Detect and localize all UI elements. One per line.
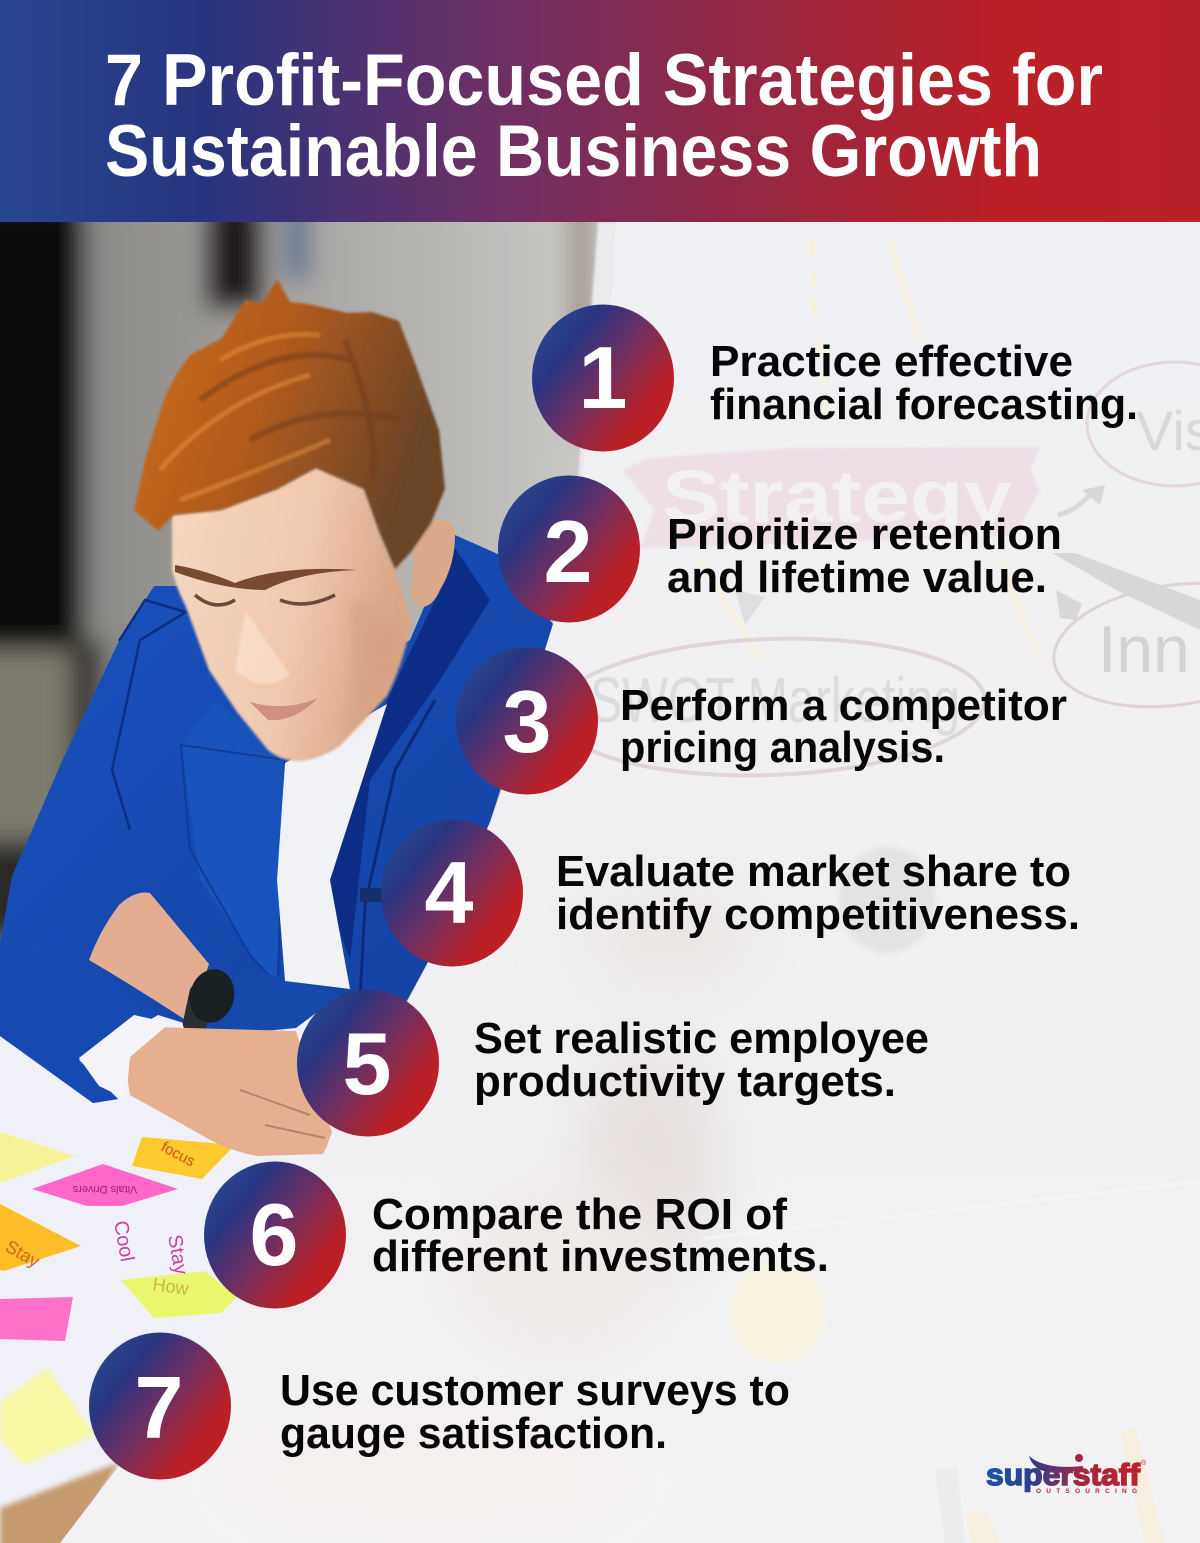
title (105, 40, 1103, 192)
step 1: financial forecasting. (710, 380, 1138, 429)
step 7: 7 (135, 1358, 183, 1457)
ear (411, 519, 455, 607)
sticky notes: Stay (163, 1233, 192, 1276)
step 3: Perform a competitor (620, 681, 1067, 730)
sticky notes: Cool (109, 1219, 138, 1263)
step 4: 4 (425, 843, 474, 942)
step 3 (456, 648, 1067, 794)
white shirt (277, 704, 387, 989)
step 2 (498, 476, 1062, 622)
step 3: pricing analysis. (620, 723, 945, 772)
step 1: Practice effective (710, 337, 1073, 386)
photo background office blur (0, 200, 630, 1020)
step 5 (297, 990, 929, 1136)
nose (235, 610, 290, 684)
step 6: different investments. (372, 1232, 829, 1281)
panel: photo of businessman at table (0, 200, 630, 1543)
logo: superstaff outsourcing: OUTSOURCING (1036, 1488, 1137, 1495)
step 2: 2 (544, 502, 592, 601)
step 4: identify competitiveness. (556, 890, 1080, 939)
step 6: Compare the ROI of (372, 1190, 787, 1239)
pocket square (360, 888, 384, 902)
suit jacket (0, 535, 553, 1103)
step 4 (381, 820, 1080, 966)
shirt cuff (79, 1015, 165, 1092)
face (172, 468, 411, 761)
step 2: and lifetime value. (667, 553, 1047, 602)
step 1 (532, 304, 1138, 452)
hair (134, 279, 445, 569)
eyebrows (175, 565, 357, 590)
step 7: Use customer surveys to (280, 1366, 790, 1415)
step 6 (204, 1162, 829, 1308)
sticky notes: Stay (2, 1236, 43, 1271)
panel: faded strategy whiteboard background: Inn (1098, 612, 1190, 686)
step 6: 6 (250, 1185, 298, 1284)
step 5: Set realistic employee (474, 1014, 929, 1063)
sticky notes: focus (158, 1139, 198, 1170)
mouth (250, 698, 318, 720)
eyes (195, 595, 335, 605)
logo: superstaff outsourcing: superstaff (986, 1457, 1141, 1492)
step 5: productivity targets. (474, 1057, 896, 1106)
step 3: 3 (503, 672, 551, 771)
sticky notes (0, 1132, 237, 1465)
sticky notes: How (151, 1274, 191, 1299)
table surface (0, 996, 338, 1046)
title: Sustainable Business Growth (105, 111, 1042, 192)
step 2: Prioritize retention (667, 510, 1062, 559)
left fist (89, 892, 209, 1023)
step 1: 1 (579, 328, 627, 427)
panel: faded strategy whiteboard background: SWOT Marketing (590, 664, 960, 736)
right forearm and hand (126, 1027, 332, 1156)
head (134, 279, 455, 761)
step 7: gauge satisfaction. (280, 1409, 667, 1458)
header banner (0, 0, 1200, 222)
logo: superstaff outsourcing: ® (1141, 1459, 1147, 1467)
step 5: 5 (343, 1014, 391, 1113)
title: 7 Profit-Focused Strategies for (105, 40, 1103, 121)
step 7 (89, 1332, 790, 1480)
panel: faded strategy whiteboard background: Strategy (662, 455, 1012, 538)
sticky notes: Vitals Drivers (72, 1183, 137, 1195)
step 4: Evaluate market share to (556, 847, 1071, 896)
cheek shading (353, 606, 382, 730)
wristwatch (182, 969, 234, 1028)
